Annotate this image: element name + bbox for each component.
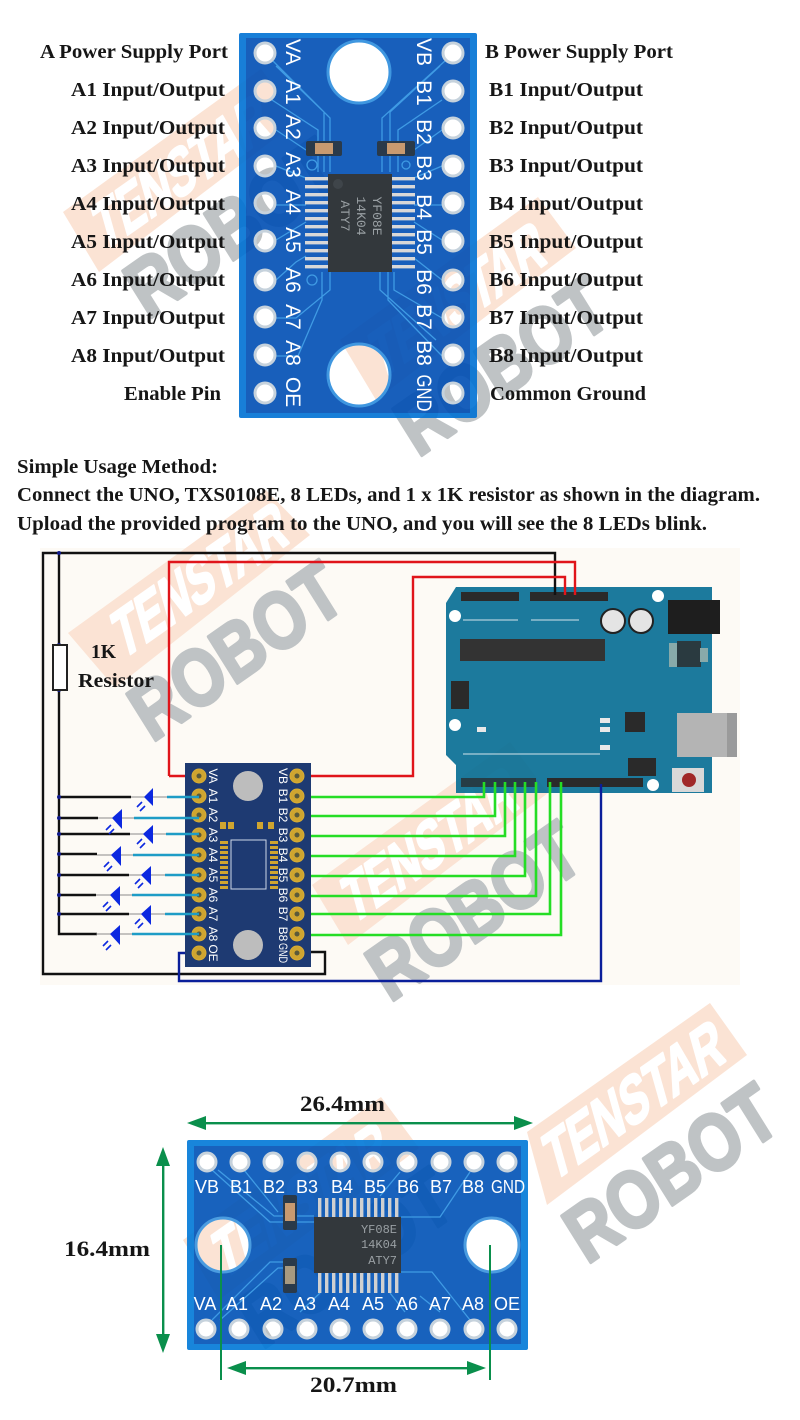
resistor [53,645,67,690]
module labels: B8 [276,927,290,942]
right pin labels [485,41,673,405]
panel: module pinout photo [40,33,673,418]
right pin labels: B Power Supply Port [485,41,673,63]
capacitors [283,1195,297,1293]
watermark 2: ROBOT [380,259,624,472]
watermark 3 [68,485,358,757]
silkscreen lines [463,620,600,754]
pcb board landscape [187,1140,528,1350]
bottom silkscreen labels: A8 [462,1294,484,1314]
wire: black led common and resistor [59,553,131,934]
watermark 3: ROBOT [114,544,358,757]
right silkscreen labels: B1 [412,80,435,106]
chip [328,174,392,272]
left silkscreen labels: A6 [281,267,304,293]
watermark 6: TENSTAR [207,1105,395,1293]
led symbols [103,788,153,950]
module labels: VB [276,768,290,784]
left pin labels: A5 Input/Output [71,231,225,253]
right pin labels: B4 Input/Output [489,193,643,215]
headers [451,592,656,787]
right pin labels: Common Ground [490,383,646,405]
wire: green [303,782,561,935]
watermark 2 [340,197,624,472]
bottom silkscreen labels: A4 [328,1294,350,1314]
voltage regulator [669,641,708,667]
watermark 4: TENSTAR [336,750,524,938]
watermark 1: ROBOT [110,121,354,334]
top silkscreen labels: B7 [430,1177,452,1197]
top silkscreen labels: B4 [331,1177,353,1197]
top pads [198,1153,516,1171]
top silkscreen labels [195,1177,525,1197]
wire: navy [179,784,601,981]
left pin labels: A8 Input/Output [71,345,225,367]
watermark 5: TENSTAR [537,1003,730,1195]
watermark 1 [63,69,354,334]
right pads [443,43,463,403]
top silkscreen labels: B2 [263,1177,285,1197]
wires: led to module [132,797,199,934]
module labels: A3 [206,828,220,843]
right silkscreen labels: B7 [412,304,435,330]
right pin labels: B6 Input/Output [489,269,643,291]
usage instructions: Simple Usage Method: [17,456,218,478]
right silkscreen labels: VB [412,38,435,66]
watermark 6: ROBOT [224,1151,468,1364]
module labels: A1 [206,789,220,804]
right silkscreen labels: B4 [412,194,435,220]
watermark 1: TENSTAR [87,77,275,265]
panel: dimensions photo [64,1091,533,1397]
top silkscreen labels: B5 [364,1177,386,1197]
wire: red [169,562,575,776]
watermark 4: ROBOT [352,804,596,1017]
left silkscreen labels: A8 [281,340,304,366]
microcontroller strip [460,639,605,661]
chip pins [305,177,415,268]
right pin labels: B8 Input/Output [489,345,643,367]
power jack [668,600,720,634]
bottom silkscreen labels: A3 [294,1294,316,1314]
pcb board top view [239,33,477,418]
bottom silkscreen labels: A7 [429,1294,451,1314]
module labels: B5 [276,868,290,883]
top silkscreen labels: VB [195,1177,219,1197]
top silkscreen labels: B8 [462,1177,484,1197]
resistor label: Resistor [78,670,154,692]
watermark 3: TENSTAR [106,485,294,673]
bottom silkscreen labels: A1 [226,1294,248,1314]
module labels: B6 [276,888,290,903]
holes [233,771,263,960]
leds [477,718,610,750]
bottom silkscreen labels [194,1294,520,1314]
right pin labels: B5 Input/Output [489,231,643,253]
pad centres [196,774,300,956]
bottom silkscreen labels: A6 [396,1294,418,1314]
left pads [255,43,275,403]
panel: wiring diagram [43,551,737,981]
right pin labels: B3 Input/Output [489,155,643,177]
chip: 14K04 [361,1238,397,1252]
left pin labels: A1 Input/Output [71,79,225,101]
arduino uno board [446,587,737,793]
module labels: A5 [206,868,220,883]
height arrow 16.4mm [156,1147,170,1353]
hole spacing arrow 20.7mm [227,1361,486,1375]
bottom silkscreen labels: OE [494,1294,520,1314]
left silkscreen labels: A3 [281,152,304,178]
junction dots [57,551,61,916]
dimension labels: 16.4mm [64,1236,150,1261]
top silkscreen labels: B1 [230,1177,252,1197]
module labels: B2 [276,808,290,823]
module labels: B1 [276,789,290,804]
capacitors [601,609,653,633]
left pin labels: A Power Supply Port [40,41,228,63]
left silkscreen labels: A1 [281,79,304,105]
bottom silkscreen labels: A5 [362,1294,384,1314]
module labels: GND [276,943,290,963]
chip [314,1217,401,1273]
module labels: A8 [206,927,220,942]
usage instructions: Upload the provided program to the UNO, and you will see the 8 LEDs blink. [17,513,707,535]
top silkscreen labels: B3 [296,1177,318,1197]
usage instructions [17,456,760,535]
bottom silkscreen labels: A2 [260,1294,282,1314]
hole guide lines [220,1245,491,1380]
mounting holes [328,41,390,406]
dimension labels: 20.7mm [310,1372,397,1397]
reset button [672,768,704,792]
module labels: A4 [206,848,220,863]
footprint pads and outline [220,822,278,889]
left pin labels: A2 Input/Output [71,117,225,139]
module labels: VA [206,768,220,784]
right silkscreen labels [412,38,435,412]
module labels: A6 [206,888,220,903]
watermark 4 [312,742,596,1017]
mounting holes [449,590,664,791]
module labels: B4 [276,848,290,863]
chip: ATY7 [368,1254,397,1268]
bottom pads [197,1320,516,1338]
right pin labels: B7 Input/Output [489,307,643,329]
wires: thin led leads [96,797,167,934]
left silkscreen labels [281,39,304,407]
left silkscreen labels: A7 [281,304,304,330]
left silkscreen labels: OE [281,377,304,407]
bottom silkscreen labels: VA [194,1294,216,1314]
right pin labels: B1 Input/Output [489,79,643,101]
left silkscreen labels: A2 [281,114,304,140]
chip: YF08E [369,196,384,236]
watermark 6 [183,1097,468,1364]
dimension labels: 26.4mm [300,1091,385,1116]
right silkscreen labels: B6 [412,269,435,295]
width arrow 26.4mm [187,1116,533,1130]
left silkscreen labels: VA [281,39,304,65]
left silkscreen labels: A4 [281,189,304,215]
module labels: A7 [206,907,220,922]
chip pins [318,1198,398,1293]
right silkscreen labels: B3 [412,155,435,181]
holes [196,1218,519,1272]
module labels [206,768,290,963]
left pin labels [40,41,228,405]
top silkscreen labels: B6 [397,1177,419,1197]
module labels: B3 [276,828,290,843]
left pin labels: A3 Input/Output [71,155,225,177]
resistor label [78,641,154,692]
top silkscreen labels: GND [491,1177,525,1197]
capacitors [306,141,415,156]
dimension labels [64,1091,397,1397]
usage instructions: Connect the UNO, TXS0108E, 8 LEDs, and 1 x 1K resistor as shown in the diagram. [17,484,760,506]
left pin labels: A6 Input/Output [71,269,225,291]
right pin labels: B2 Input/Output [489,117,643,139]
module labels: B7 [276,907,290,922]
usb port [677,713,737,757]
resistor label: 1K [91,641,116,663]
right silkscreen labels: B8 [412,340,435,366]
right silkscreen labels: GND [412,374,435,412]
left silkscreen labels: A5 [281,227,304,253]
right silkscreen labels: B5 [412,229,435,255]
chip: 14K04 [353,196,368,236]
chip: YF08E [361,1223,397,1237]
gold pads [192,769,304,960]
txs0108e module diagram [185,763,311,967]
module labels: OE [206,944,220,962]
wire: black ground [43,553,555,974]
right silkscreen labels: B2 [412,119,435,145]
left pin labels: A7 Input/Output [71,307,225,329]
watermark 2: TENSTAR [364,205,552,393]
module labels: A2 [206,808,220,823]
left pin labels: Enable Pin [124,383,221,405]
chip: ATY7 [337,200,352,232]
left pin labels: A4 Input/Output [71,193,225,215]
